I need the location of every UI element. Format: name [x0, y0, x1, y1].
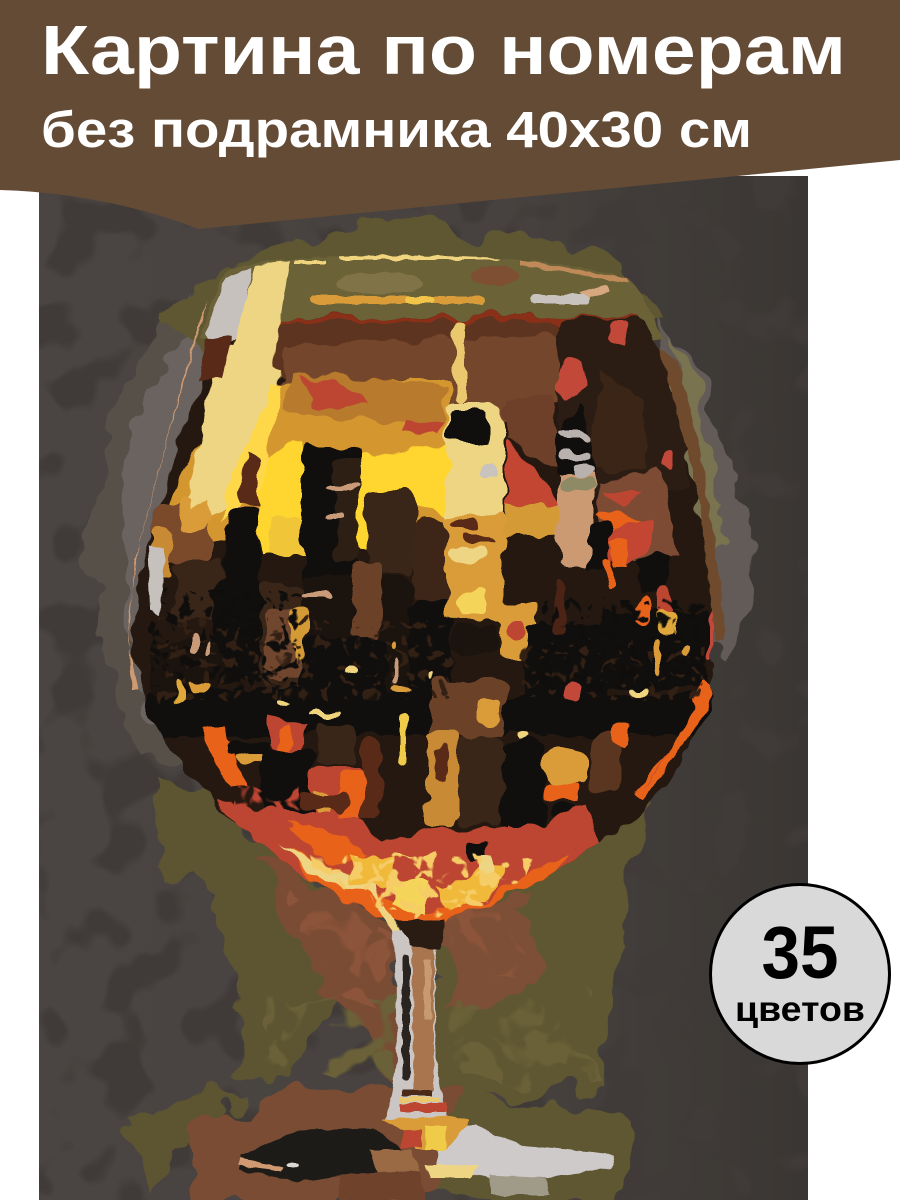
glass stem [378, 905, 449, 1120]
glass left highlight [128, 260, 725, 690]
painting: brandy glass with city reflection [39, 176, 808, 1200]
sunset sky [150, 316, 690, 585]
horizon band and lower reflections [144, 611, 714, 828]
badge: 35 colours: 35 [762, 911, 838, 994]
banner [0, 0, 900, 229]
pale central tower [445, 318, 537, 658]
dark liquid base [120, 300, 740, 940]
title: Картина по номерам [41, 11, 846, 89]
mottled paint texture [150, 590, 710, 855]
glass bowl upper part with rim [200, 254, 663, 340]
small window lights [175, 485, 688, 740]
liquid with city reflection [130, 309, 714, 924]
badge: 35 colours: цветов [735, 990, 865, 1029]
badge: 35 colours [710, 884, 890, 1064]
glass foot [238, 1116, 615, 1200]
subtitle: без подрамника 40x30 см [41, 101, 752, 158]
glowing bottom of liquid [215, 795, 605, 935]
left skyline buildings [135, 447, 451, 730]
right skyline buildings [503, 405, 720, 700]
painted background blotches [39, 176, 808, 1200]
